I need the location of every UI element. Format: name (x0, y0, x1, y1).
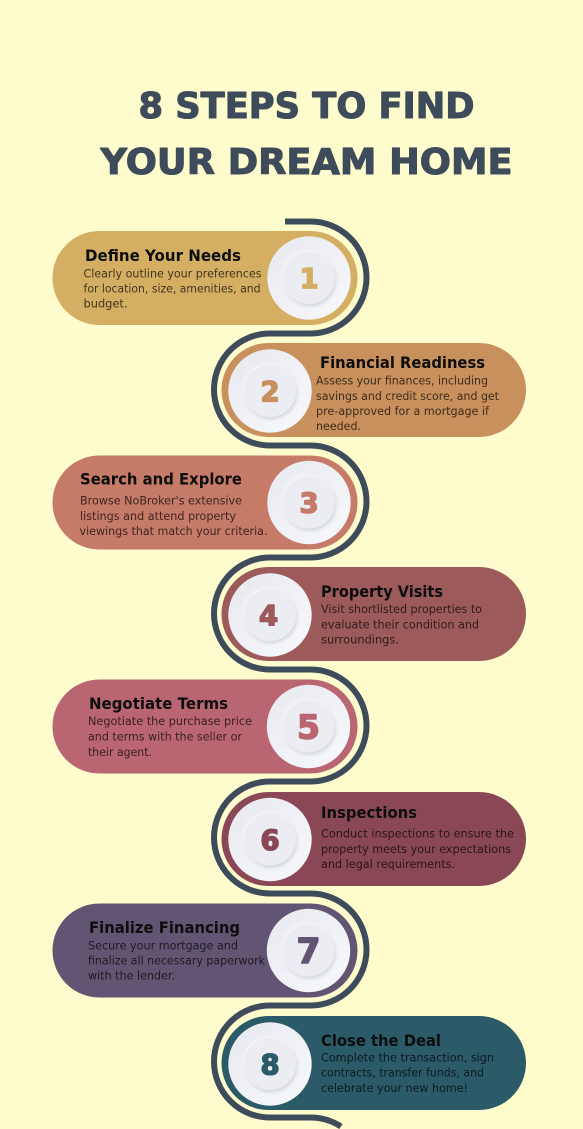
pill 8 (222, 1016, 526, 1110)
title: 8 STEPS TO FIND (138, 86, 474, 127)
step 4: Property Visits (222, 567, 526, 661)
pill 6 (222, 792, 526, 886)
description 4: Visit shortlisted properties to (321, 602, 482, 616)
description 8: Complete the transaction, sign (321, 1050, 494, 1064)
pill 7 (52, 904, 358, 998)
heading 5: Negotiate Terms (89, 695, 228, 713)
description 8: contracts, transfer funds, and (321, 1066, 484, 1080)
number badge 8 (228, 1022, 312, 1106)
description 1: Clearly outline your preferences (84, 266, 262, 280)
description 5: Negotiate the purchase price (88, 714, 252, 728)
description 2: Assess your finances, including (316, 374, 488, 388)
description 7 (88, 938, 265, 982)
number badge 1 (267, 236, 351, 320)
description 3: Browse NoBroker's extensive (80, 494, 242, 508)
description 4: surroundings. (321, 632, 399, 646)
step 1: Define Your Needs (52, 231, 358, 325)
description 7: finalize all necessary paperwork (88, 954, 265, 968)
description 6: Conduct inspections to ensure the (321, 826, 514, 840)
number badge 6 (228, 798, 312, 881)
description 3 (80, 494, 268, 538)
number badge 4 (228, 573, 312, 657)
number badge 7: 7 (296, 932, 321, 972)
title: YOUR DREAM HOME (99, 142, 513, 183)
description 1 (84, 266, 262, 310)
number badge 4: 4 (259, 600, 278, 632)
number badge 7 (267, 909, 350, 992)
number badge 8: 8 (260, 1049, 280, 1081)
description 2: needed. (316, 419, 361, 433)
number badge 5 (267, 685, 350, 768)
step 6: Inspections (222, 792, 526, 886)
description 2: pre-approved for a mortgage if (316, 404, 490, 418)
number badge 6: 6 (260, 824, 280, 856)
number badge 5: 5 (297, 708, 320, 746)
description 2 (316, 374, 499, 433)
step 5: Negotiate Terms (52, 680, 358, 774)
description 6: property meets your expectations (321, 842, 511, 856)
description 7: with the lender. (88, 968, 175, 982)
step 2: Financial Readiness (222, 343, 526, 437)
step 3: Search and Explore (52, 456, 358, 550)
step 8: Close the Deal (222, 1016, 526, 1110)
description 7: Secure your mortgage and (88, 938, 238, 952)
heading 7: Finalize Financing (89, 919, 240, 937)
number badge 3 (267, 461, 351, 544)
heading 3: Search and Explore (80, 470, 242, 488)
winding road line (214, 222, 366, 1126)
heading 1: Define Your Needs (85, 247, 241, 265)
number badge 1: 1 (299, 263, 319, 295)
description 8: celebrate your new home! (321, 1081, 468, 1095)
pill 4 (222, 567, 526, 661)
description 4 (321, 602, 482, 646)
pill 2 (222, 343, 526, 437)
description 5 (88, 714, 252, 759)
description 1: budget. (84, 296, 128, 310)
description 1: for location, size, amenities, and (84, 282, 260, 296)
description 5: their agent. (88, 745, 152, 759)
step 7: Finalize Financing (52, 904, 358, 998)
pill 1 (52, 231, 358, 325)
description 2: savings and credit score, and get (316, 389, 499, 403)
heading 8: Close the Deal (321, 1032, 441, 1050)
description 6: and legal requirements. (321, 857, 455, 871)
heading 4: Property Visits (321, 583, 443, 601)
description 8 (321, 1050, 494, 1095)
description 6 (321, 826, 514, 871)
description 3: viewings that match your criteria. (80, 524, 268, 538)
description 5: and terms with the seller or (88, 730, 242, 744)
number badge 2: 2 (260, 376, 280, 408)
number badge 3: 3 (299, 488, 319, 520)
pill 3 (52, 456, 358, 550)
description 4: evaluate their condition and (321, 618, 479, 632)
heading 6: Inspections (321, 804, 417, 822)
heading 2: Financial Readiness (320, 354, 485, 372)
description 3: listings and attend property (80, 509, 236, 523)
pill 5 (52, 680, 358, 774)
number badge 2 (228, 349, 312, 433)
title (99, 86, 513, 183)
